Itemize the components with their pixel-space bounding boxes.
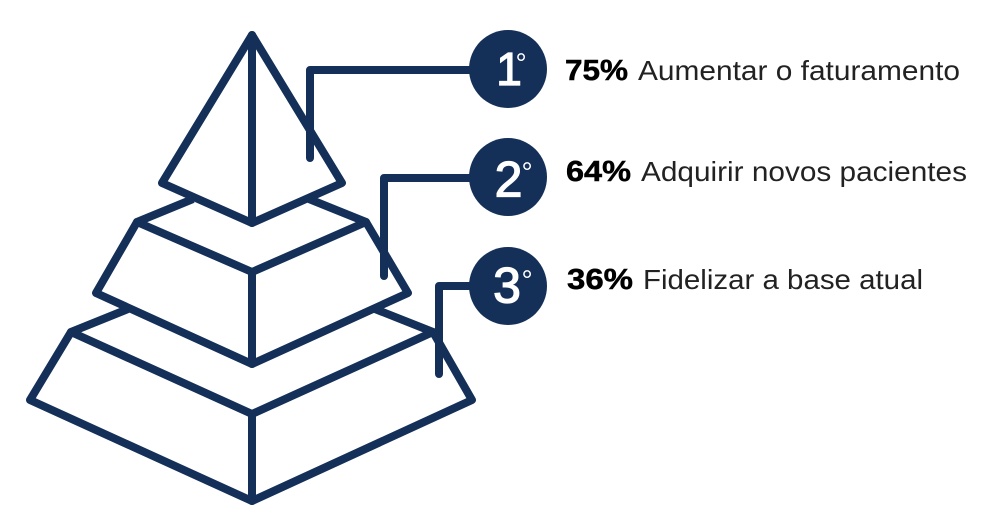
label 3: Fidelizar a base atual [643,264,923,295]
label 1: 75% [565,55,628,87]
label 3: 36% [567,264,633,296]
badge 2: 2 [495,152,522,208]
connector 1 [310,70,480,158]
badge 1 [469,30,547,108]
pyramid tier 2 [96,199,408,364]
badge 3 [469,247,547,325]
badge 2 [469,138,547,216]
pyramid tier 1 [162,35,342,223]
connector 2 [384,178,480,276]
badge 2: ° [522,156,533,188]
label 2: Adquirir novos pacientes [641,156,967,187]
label 1: Aumentar o faturamento [638,55,960,86]
badge 3: 3 [493,258,521,314]
badge 1: 1 [496,43,522,95]
pyramid illustration [30,35,472,501]
pyramid tier 3 [30,309,472,501]
connector 3 [439,286,480,374]
badge 3: ° [522,264,533,296]
badge 1: ° [516,48,527,78]
label 2: 64% [566,156,631,188]
